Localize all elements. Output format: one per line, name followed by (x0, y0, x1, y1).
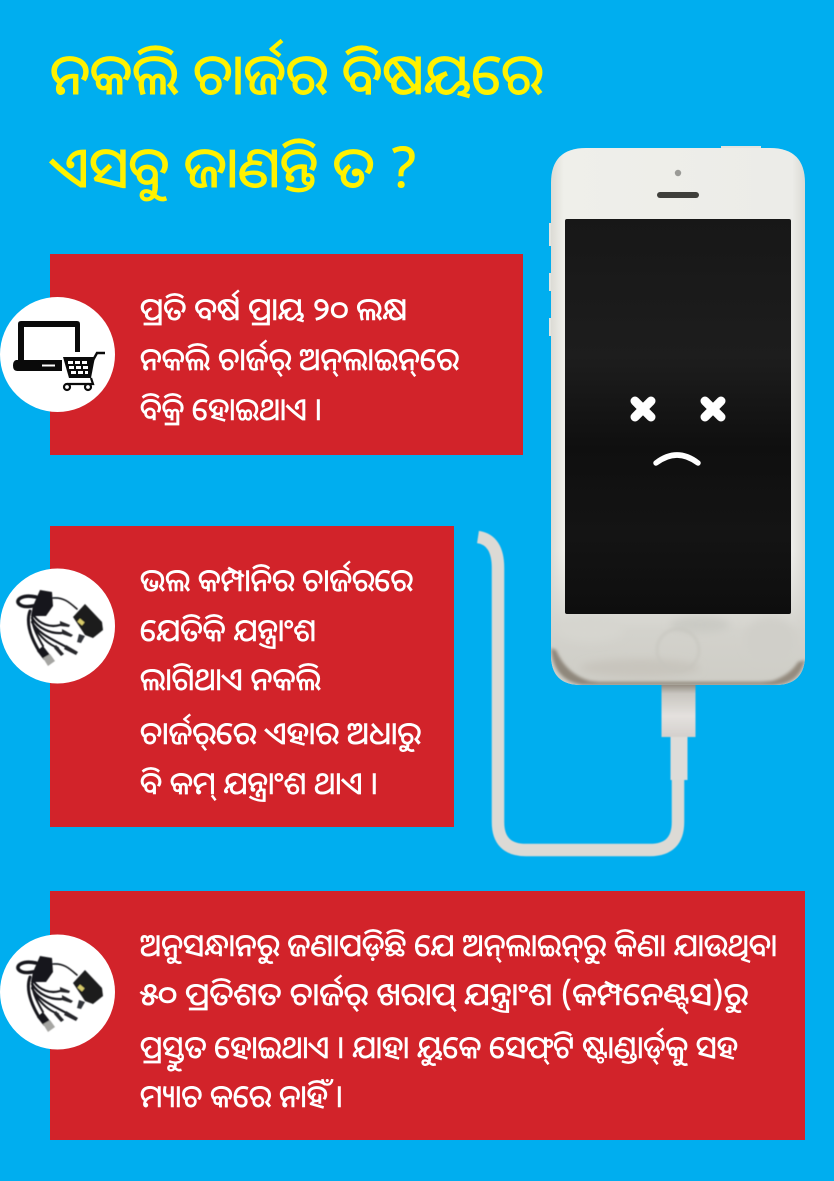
panel text: ୫୦ ପ୍ରତିଶତ ଚାର୍ଜର୍ ଖରାପ୍ ଯନ୍ତ୍ରାଂଶ (କମ୍ପନେଣ୍ଟ୍‌ସ)ରୁ (140, 973, 748, 1015)
charger connector (662, 684, 696, 780)
panel text: ଚାର୍ଜର୍‌ରେ ଏହାର ଅଧାରୁ (140, 712, 421, 754)
phone speaker (657, 192, 699, 198)
panel text: ନକଲି ଚାର୍ଜର୍ ଅନ୍‌ଲାଇନ୍‌ରେ (140, 338, 459, 380)
icon: multi-pin charger (0, 934, 115, 1050)
title: ଏସବୁ ଜାଣନ୍ତି ତ ? (49, 128, 418, 204)
phone body (551, 148, 805, 685)
phone camera (675, 170, 681, 176)
illustration: dead phone with charger cable (478, 146, 805, 850)
panel text (140, 924, 777, 1117)
icon: multi-pin charger (0, 568, 115, 684)
laptop (13, 321, 80, 371)
panel text: ବି କମ୍ ଯନ୍ତ୍ରାଂଶ ଥାଏ । (140, 762, 378, 804)
title (49, 35, 543, 204)
panel text: ପ୍ରତି ବର୍ଷ ପ୍ରାୟ ୨୦ ଲକ୍ଷ (140, 288, 407, 330)
panel text: ବିକ୍ରି ହୋଇଥାଏ । (140, 388, 322, 430)
panel: fewer components (50, 526, 454, 827)
phone side buttons (549, 146, 761, 336)
panel text (140, 288, 459, 430)
panel text: ଯେତିକି ଯନ୍ତ୍ରାଂଶ (140, 609, 316, 651)
panel: research finding (50, 891, 805, 1140)
phone weathering (588, 618, 724, 674)
icon: laptop with shopping cart (0, 297, 115, 412)
shopping cart (63, 353, 105, 390)
charger cable (478, 537, 678, 850)
panel text: ଲାଗିଥାଏ ନକଲି (140, 658, 321, 700)
panel: online sales (50, 254, 523, 455)
phone screen (565, 219, 791, 614)
panel text (140, 559, 421, 804)
sad face (635, 401, 721, 463)
panel text: ମ୍ୟାଚ କରେ ନାହିଁ । (140, 1075, 343, 1117)
panel text: ପ୍ରସ୍ତୁତ ହୋଇଥାଏ । ଯାହା ୟୁକେ ସେଫ୍‌ଟି ଷ୍ଟାଣ୍ଡାର୍ଡ୍‌କୁ ସହ (140, 1026, 738, 1072)
panel text: ଅନୁସନ୍ଧାନରୁ ଜଣାପଡ଼ିଛି ଯେ ଅନ୍‌ଲାଇନ୍‌ରୁ କିଣା ଯାଉଥିବା (140, 924, 777, 966)
panel text: ଭଲ କମ୍ପାନିର ଚାର୍ଜରରେ (140, 559, 413, 601)
title: ନକଲି ଚାର୍ଜର ବିଷୟରେ (50, 35, 543, 111)
